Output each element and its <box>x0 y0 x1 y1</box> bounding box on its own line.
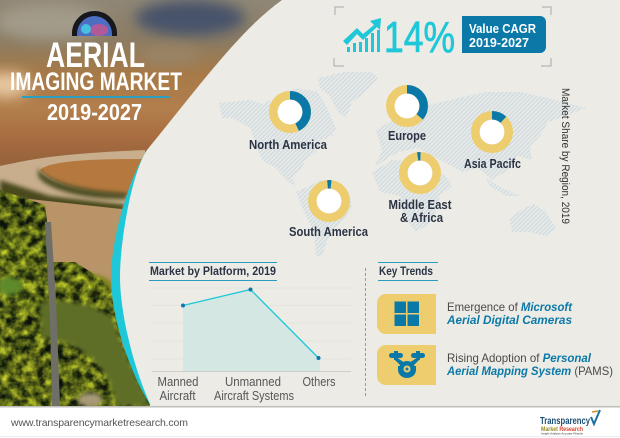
icon: camera lens <box>72 11 117 36</box>
label: Europe: Europe <box>388 129 426 143</box>
CAGR label box <box>462 16 546 53</box>
panel: key trends <box>377 262 613 385</box>
forest <box>0 190 155 407</box>
chart axis labels: Aircraft Systems <box>214 389 294 403</box>
world map <box>219 72 586 256</box>
chart heading <box>149 262 277 281</box>
donut: South America <box>311 183 347 219</box>
title block <box>10 11 182 125</box>
label: Asia Pacific: Asia Pacifc <box>464 157 521 171</box>
footer url: www.transparencymarketresearch.com <box>10 417 188 429</box>
donut: Europe <box>390 89 424 123</box>
trend 2 text <box>446 351 613 378</box>
logo: Transparency Market Research: Transparency <box>540 415 590 427</box>
label: South America: South America <box>289 225 369 239</box>
chart axis labels: Others <box>302 375 336 389</box>
chart axis labels: Unmanned <box>225 375 281 389</box>
footer <box>0 406 620 437</box>
donut: Middle East and Africa <box>401 154 439 192</box>
main panel <box>120 0 620 406</box>
key trends heading <box>378 262 438 281</box>
label: Middle East and Africa: & Africa <box>400 211 444 225</box>
trend 1 text: Aerial Digital Cameras <box>446 313 572 327</box>
title: Aerial: AERIAL <box>46 36 145 75</box>
chart heading: Market by Platform, 2019 <box>150 264 276 278</box>
key trends heading: Key Trends <box>379 264 433 278</box>
trend 2 text: Rising Adoption of Personal <box>447 351 592 365</box>
chart axis labels: Manned <box>158 375 199 389</box>
logo: Transparency Market Research: Insight Analysis Accurate Results <box>541 432 583 436</box>
trend 1 text <box>446 300 573 327</box>
trend 1 icon: windows tile <box>377 294 436 334</box>
label: North America: North America <box>249 138 328 152</box>
title: years: 2019-2027 <box>47 99 142 125</box>
cyan arc <box>111 150 160 406</box>
panel: market by platform <box>149 262 351 403</box>
icon: rising chart arrow <box>343 18 381 52</box>
CAGR label box: 2019-2027 <box>469 36 529 50</box>
logo: Transparency Market Research <box>540 410 600 436</box>
label: Middle East and Africa <box>388 198 452 225</box>
title: Imaging Market: IMAGING MARKET <box>10 68 182 96</box>
donut: Asia Pacific <box>475 115 509 149</box>
logo: Transparency Market Research: Market Research <box>541 426 583 433</box>
CAGR callout <box>334 7 551 66</box>
label: Middle East and Africa: Middle East <box>388 198 452 212</box>
donut: North America <box>273 95 307 129</box>
field <box>26 198 122 214</box>
CAGR value: 14% <box>384 13 455 62</box>
line chart <box>152 288 351 372</box>
photo: aerial landscape <box>0 0 290 407</box>
trend 2 text: Aerial Mapping System (PAMS) <box>446 364 613 378</box>
trend 2 icon: drone camera <box>377 345 436 385</box>
vertical label: market share by region: Market Share by Region, 2019 <box>559 88 571 224</box>
chart axis labels <box>158 375 336 403</box>
CAGR label box: Value CAGR <box>469 22 536 36</box>
trend 1 text: Emergence of Microsoft <box>447 300 573 314</box>
chart axis labels: Aircraft <box>160 389 196 403</box>
river and island <box>0 150 145 212</box>
